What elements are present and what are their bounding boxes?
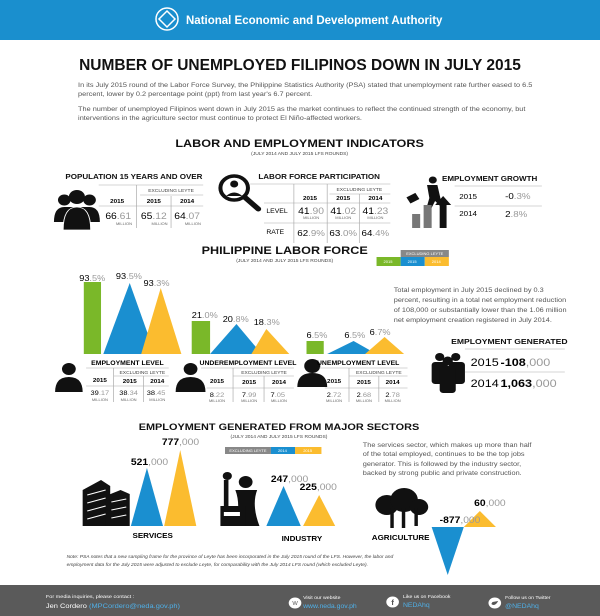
chart: underemployment level: 18.3% — [254, 318, 280, 327]
text: services sector: backed by strong public and private construction. — [363, 470, 522, 477]
icon: factory — [220, 472, 259, 526]
title: NUMBER OF UNEMPLOYED FILIPINOS DOWN IN JULY 2015 — [79, 57, 521, 74]
panel: population: MILLION — [152, 222, 168, 226]
heading: philippine labor force — [202, 244, 368, 263]
table: employment level: 38.45 — [147, 390, 166, 397]
intro text: interventions in the agriculture sector must continue to protect El Niño-affected workers. — [78, 115, 362, 122]
table: underemployment level: MILLION — [209, 399, 225, 403]
header bar — [0, 0, 600, 40]
panel: employment generated: 2014 — [471, 377, 499, 390]
chart: unemployment level: 6.7% — [370, 328, 391, 337]
icon: facebook — [386, 596, 399, 608]
panel: labor force participation — [220, 172, 390, 243]
table: employment level: 2015 — [93, 378, 108, 384]
table: underemployment level: MILLION — [271, 399, 287, 403]
text: total employment: Total employment in July 2015 declined by 0.3 — [394, 287, 544, 294]
text: services sector: The services sector, which makes up more than half — [363, 442, 532, 449]
chart: employment level: 93.3% — [144, 279, 170, 288]
chart: employment level — [79, 272, 181, 354]
note — [67, 554, 394, 567]
panel: population: 2015 — [147, 199, 162, 205]
intro text: In its July 2015 round of the Labor Force Survey, the Philippine Statistics Authority (PSA) stated that unemployment rate further eased to 6.5 — [78, 82, 532, 89]
panel: employment growth: 2014 — [459, 209, 477, 218]
legend: labor force: 2014 — [432, 260, 441, 264]
panel: labor force participation: 2015 — [303, 196, 318, 202]
panel: population — [54, 172, 203, 230]
heading: labor and employment indicators: (JULY 2014 AND JULY 2015 LFS ROUNDS) — [251, 151, 349, 156]
panel: employment generated: EMPLOYMENT GENERATED — [451, 337, 568, 346]
table: employment level: 38.34 — [119, 390, 138, 397]
footer: Like us on Facebook — [403, 594, 451, 600]
chart: industry: INDUSTRY — [282, 534, 322, 543]
panel: employment generated: 2015 — [471, 356, 499, 369]
table: underemployment level: 7.05 — [271, 392, 285, 399]
table: employment level: EXCLUDING LEYTE — [120, 370, 165, 375]
panel: employment growth: -0.3% — [505, 192, 531, 201]
table: underemployment level: EXCLUDING LEYTE — [241, 370, 287, 375]
table: unemployment level: MILLION — [356, 399, 372, 403]
table: employment level: MILLION — [121, 398, 137, 402]
heading: employment from sectors — [139, 423, 419, 439]
note: Note: PSA notes that a new sampling frame for the province of Leyte has been incorporated in the July 2015 round of the LFS. However, the labor and — [67, 554, 394, 559]
chart: industry: 225,000 — [300, 483, 337, 493]
table: unemployment level: UNEMPLOYMENT LEVEL — [317, 360, 399, 367]
header text: National Economic and Development Authority — [186, 15, 443, 27]
chart: underemployment level — [192, 311, 289, 354]
panel: labor force participation: 2015 — [336, 196, 351, 202]
panel: population: 65.12 — [141, 212, 167, 222]
text: total employment: net employment creation registered in July 2014. — [394, 317, 552, 324]
footer: Follow us on Twitter — [505, 595, 551, 601]
legend: labor force: 2015 — [384, 260, 392, 264]
icon: person — [176, 363, 205, 392]
footer: Jen Cordero (MPCordero@neda.gov.ph) — [46, 603, 180, 610]
intro text: percent, lower by 0.2 percentage point (ppt) from last year's 6.7 percent. — [78, 91, 312, 98]
table: employment level: EMPLOYMENT LEVEL — [91, 360, 164, 367]
table: employment level: 2014 — [150, 379, 165, 385]
table: unemployment level: 2.72 — [327, 392, 341, 399]
text: services sector: of the total employed, continues to be the top jobs — [363, 451, 525, 458]
icon: climbing businessman — [406, 176, 451, 228]
panel: labor force participation: LEVEL — [266, 208, 288, 215]
table: employment level — [55, 360, 169, 402]
footer: www.neda.gov.ph — [302, 603, 357, 610]
panel: employment growth — [406, 174, 542, 228]
legend: labor force: 2015 — [408, 260, 417, 264]
intro text — [78, 82, 532, 122]
text: services sector — [363, 442, 532, 477]
footer: For media inquiries, please contact : — [46, 594, 134, 600]
legend: sectors: EXCLUDING LEYTE — [229, 449, 267, 453]
chart: services — [83, 438, 199, 540]
text: total employment: percent, resulting in a total net employment reduction — [394, 297, 566, 304]
table: employment level: MILLION — [149, 398, 166, 402]
text: total employment — [394, 287, 567, 324]
chart: agriculture: AGRICULTURE — [372, 533, 430, 542]
note: employment data for the July 2015 were adjusted to exclude Leyte, for comparability with the July 2014 LFS round (which excluded Leyte). — [67, 562, 368, 567]
table: underemployment level: 8.22 — [210, 392, 224, 399]
icon: twitter — [488, 598, 501, 608]
icon: NEDA logo — [156, 8, 178, 30]
chart: unemployment level: 6.5% — [307, 331, 328, 340]
panel: labor force participation: 41.90 — [298, 207, 324, 217]
panel: employment generated — [432, 337, 568, 393]
table: underemployment level: UNDEREMPLOYMENT LEVEL — [200, 360, 296, 367]
table: underemployment level: 2014 — [272, 380, 287, 386]
panel: labor force participation: 41.02 — [330, 207, 356, 217]
panel: labor force participation: 41.23 — [362, 207, 388, 217]
table: unemployment level: MILLION — [385, 399, 401, 403]
table: employment level: 39.17 — [91, 390, 109, 397]
table: unemployment level: 2015 — [357, 380, 372, 386]
footer: Visit our website — [303, 595, 341, 601]
chart: unemployment level: 6.5% — [344, 331, 366, 340]
heading: employment from sectors: EMPLOYMENT GENERATED FROM MAJOR SECTORS — [139, 423, 419, 433]
panel: labor force participation: 64.4% — [362, 229, 389, 238]
heading: labor and employment indicators — [175, 137, 424, 156]
text: total employment: of 108,000 or substantially lower than the 1.06 million — [394, 307, 567, 314]
icon: buildings — [83, 480, 130, 526]
icon: website — [289, 598, 301, 608]
text: services sector: generator. This is followed by the industry sector, — [363, 461, 521, 468]
legend: labor force — [377, 250, 449, 266]
footer: @NEDAhq — [505, 603, 539, 610]
chart: employment level: 93.5% — [116, 272, 142, 281]
panel: labor force participation: 62.9% — [297, 229, 325, 238]
chart: services: 777,000 — [162, 438, 199, 448]
table: employment level: 2015 — [123, 379, 137, 385]
panel: employment generated: 1,063,000 — [501, 377, 557, 390]
footer: NEDAhq — [403, 602, 430, 609]
chart: underemployment level: 20.8% — [223, 315, 249, 324]
panel: labor force participation: MILLION — [303, 216, 319, 220]
panel: labor force participation: 63.0% — [329, 229, 357, 238]
panel: labor force participation: LABOR FORCE PARTICIPATION — [258, 172, 380, 181]
table: unemployment level: 2.78 — [385, 392, 400, 399]
chart: underemployment level: 21.0% — [192, 311, 218, 320]
panel: labor force participation: EXCLUDING LEYTE — [337, 187, 382, 192]
table: unemployment level: 2.68 — [357, 392, 371, 399]
panel: labor force participation: 2014 — [368, 196, 383, 202]
heading: philippine labor force: (JULY 2014 AND JULY 2015 LFS ROUNDS) — [236, 258, 334, 263]
table: unemployment level: 2014 — [386, 380, 400, 386]
chart: industry — [220, 472, 337, 543]
table: employment level: MILLION — [92, 398, 108, 402]
table: unemployment level: EXCLUDING LEYTE — [356, 370, 402, 375]
icon: magnifier — [220, 176, 258, 209]
table: unemployment level: MILLION — [326, 399, 342, 403]
icon: website: W — [292, 601, 299, 607]
legend: sectors: 2014 — [278, 449, 287, 453]
panel: population: 66.61 — [105, 212, 131, 222]
legend: sectors: 2015 — [303, 449, 312, 453]
icon: trees — [375, 488, 428, 528]
intro text: The number of unemployed Filipinos went down in July 2015 as the market continues to reflect the continued strength of the economy, but — [78, 106, 525, 113]
panel: employment growth: 2015 — [459, 192, 477, 201]
table: underemployment level — [176, 360, 296, 403]
panel: population: 64.07 — [174, 212, 200, 222]
panel: employment generated: -108,000 — [501, 356, 551, 369]
panel: population: POPULATION 15 YEARS AND OVER — [65, 172, 203, 181]
chart: agriculture: 60,000 — [474, 499, 506, 509]
table: unemployment level: 2015 — [327, 379, 342, 385]
panel: employment growth: 2.8% — [505, 210, 527, 219]
panel: population: 2015 — [110, 199, 125, 205]
panel: population: 2014 — [180, 199, 195, 205]
panel: labor force participation: RATE — [266, 229, 285, 236]
chart: agriculture: -877,000 — [440, 516, 480, 526]
chart: services: SERVICES — [132, 531, 173, 540]
chart: unemployment level — [307, 328, 404, 354]
icon: facebook: f — [391, 598, 394, 607]
legend: labor force: EXCLUDING LEYTE — [406, 252, 444, 256]
chart: employment level: 93.5% — [79, 274, 106, 283]
panel: labor force participation: MILLION — [335, 216, 352, 220]
icon: crowd — [432, 353, 465, 393]
table: underemployment level: 2015 — [210, 379, 225, 385]
table: underemployment level: MILLION — [241, 399, 257, 403]
icon: person — [55, 363, 83, 392]
chart: agriculture — [372, 488, 506, 575]
panel: population: EXCLUDING LEYTE — [148, 188, 194, 193]
panel: population: MILLION — [116, 222, 132, 226]
table: unemployment level — [297, 359, 408, 403]
footer — [0, 585, 600, 616]
chart: industry: 247,000 — [271, 475, 308, 485]
panel: population: MILLION — [185, 222, 201, 226]
table: underemployment level: 2015 — [242, 380, 257, 386]
heading: philippine labor force: PHILIPPINE LABOR FORCE — [202, 244, 368, 257]
heading: labor and employment indicators: LABOR AND EMPLOYMENT INDICATORS — [175, 137, 424, 150]
heading: employment from sectors: (JULY 2014 AND JULY 2015 LFS ROUNDS) — [231, 434, 328, 439]
icon: people — [54, 190, 100, 230]
panel: labor force participation: MILLION — [367, 216, 384, 220]
icon: person — [297, 359, 327, 387]
chart: services: 521,000 — [131, 458, 168, 468]
panel: employment growth: EMPLOYMENT GROWTH — [442, 174, 537, 183]
table: underemployment level: 7.99 — [242, 392, 256, 399]
legend: sectors — [225, 447, 321, 454]
